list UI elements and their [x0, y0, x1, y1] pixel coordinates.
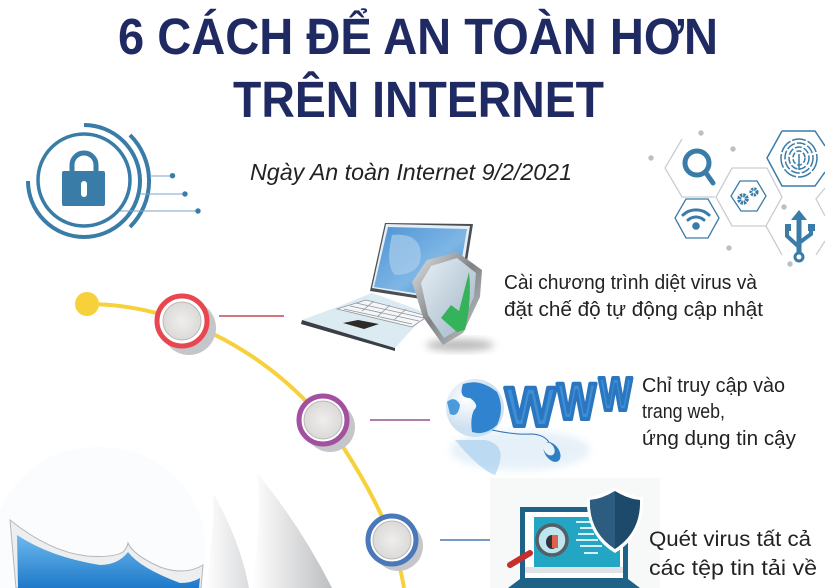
illustration: laptop with shield: [301, 223, 494, 351]
icon: security hexagons cluster: [648, 130, 825, 267]
text: step 1: đặt chế độ tự động cập nhật: [504, 299, 763, 321]
decorative shield with waves, bottom left: [0, 447, 332, 588]
text: step 1: [504, 272, 763, 321]
text: step 2: trang web,: [642, 401, 725, 423]
text: step 2: Chỉ truy cập vào: [642, 375, 785, 397]
illustration: globe with WWW and mouse: W: [557, 373, 597, 430]
icon: usb: [785, 210, 815, 261]
text: step 2: ứng dụng tin cậy: [642, 428, 796, 450]
illustration: globe with WWW and mouse: W: [599, 368, 632, 420]
icon: padlock with circuit rings: [28, 125, 201, 237]
connector 1: [219, 315, 284, 317]
text: step 3: các tệp tin tải về: [649, 557, 817, 580]
icon: fingerprint hexagon: [767, 131, 825, 186]
text: step 2: [642, 375, 796, 450]
connector 3: [440, 539, 505, 541]
connector 2: [370, 419, 430, 421]
timeline: yellow curve: [87, 304, 404, 588]
text: step 3: Quét virus tất cả: [649, 528, 811, 551]
title: 6 CÁCH ĐỂ AN TOÀN HƠN: [118, 7, 718, 65]
icon: gears hexagon: [731, 181, 766, 211]
node 1: red: [157, 296, 216, 355]
text: step 1: Cài chương trình diệt virus và: [504, 272, 758, 294]
timeline start dot: [75, 292, 99, 316]
illustration: virus scan laptop: [490, 478, 660, 588]
node 3: blue: [368, 516, 423, 571]
title: [118, 7, 718, 128]
text: step 3: [649, 528, 817, 580]
illustration: globe with WWW and mouse: [446, 368, 632, 475]
icon: magnifier: [685, 151, 713, 183]
title: TRÊN INTERNET: [233, 70, 604, 128]
illustration: globe with WWW and mouse: W: [505, 375, 556, 438]
subtitle: date: Ngày An toàn Internet 9/2/2021: [250, 159, 572, 185]
icon: wifi hexagon: [675, 199, 719, 238]
node 2: purple: [299, 396, 355, 452]
